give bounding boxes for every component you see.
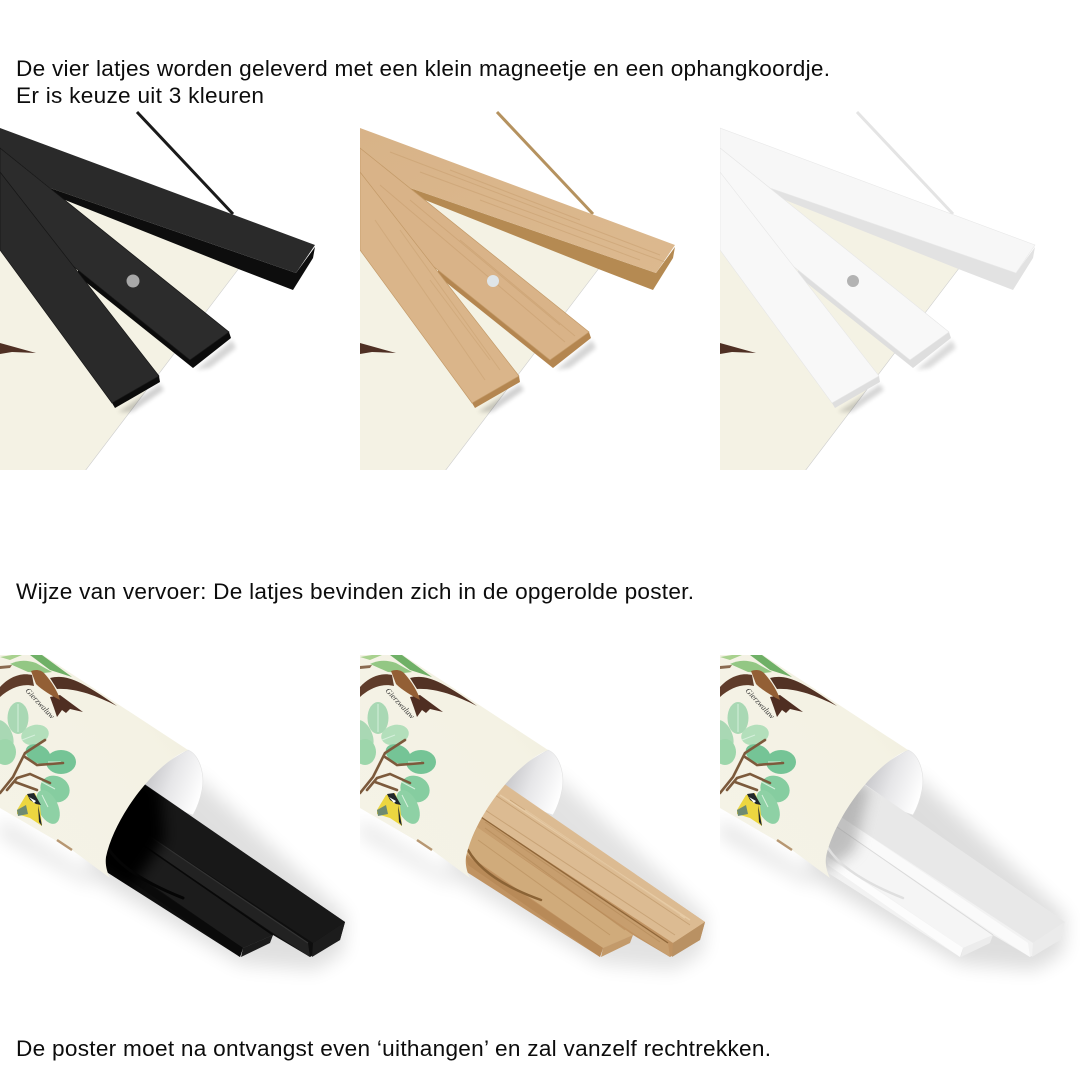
tube interior — [505, 750, 563, 814]
cord — [468, 850, 541, 900]
inner mouth shading — [810, 780, 870, 875]
species label: Gierzwaluw — [24, 686, 57, 721]
poster sheet — [0, 185, 243, 471]
shadow — [360, 775, 706, 970]
heading: intro text — [16, 56, 830, 108]
strips — [106, 784, 345, 957]
bird tail detail — [720, 343, 756, 354]
rolled poster — [348, 655, 548, 878]
species label: Gierzwaluw — [744, 686, 777, 721]
strips — [466, 784, 705, 957]
rolled poster — [708, 655, 908, 878]
strip three — [0, 172, 164, 412]
bird tail detail — [0, 343, 36, 354]
strips — [780, 750, 1065, 957]
strip one — [360, 128, 675, 290]
hanging cord — [857, 112, 953, 214]
tube interior — [840, 750, 923, 815]
strip one — [0, 128, 315, 290]
tube interior — [145, 750, 203, 814]
inner mouth darkening — [106, 785, 167, 890]
panel: white strips in tube — [708, 655, 1066, 970]
strip one — [720, 128, 1035, 290]
hanging cord — [497, 112, 593, 214]
strip two with magnet — [360, 148, 596, 370]
panel: oak strips on poster — [360, 112, 675, 471]
poster artwork — [348, 655, 477, 850]
shadow — [720, 775, 1066, 970]
bird tail detail — [360, 343, 396, 354]
panel: black strips in tube — [0, 655, 346, 970]
strip three — [360, 172, 524, 412]
rolled poster — [0, 655, 188, 878]
poster artwork — [0, 655, 117, 850]
cord — [140, 876, 184, 900]
poster artwork — [708, 655, 837, 850]
panel: oak strips in tube — [348, 655, 706, 970]
strip two with magnet — [0, 148, 236, 370]
cord — [828, 848, 903, 898]
tube lower lip — [100, 850, 135, 883]
poster sheet — [720, 185, 963, 471]
tube lower lip — [820, 850, 855, 883]
panel: white strips on poster — [720, 112, 1035, 471]
strip two with magnet — [720, 148, 956, 370]
tube lower lip — [460, 850, 495, 883]
footer text: De poster moet na ontvangst even ‘uithangen’ en zal vanzelf rechtrekken. — [16, 1036, 771, 1061]
heading: intro text: Er is keuze uit 3 kleuren — [16, 83, 264, 108]
strip three — [720, 172, 884, 412]
heading: intro text: De vier latjes worden geleverd met een klein magneetje en een ophangkoordje. — [16, 56, 830, 81]
shadow — [0, 775, 346, 970]
hanging cord — [137, 112, 233, 214]
panel: black strips on poster — [0, 112, 315, 471]
poster sheet — [360, 185, 603, 471]
species label: Gierzwaluw — [384, 686, 417, 721]
subheading: transport: Wijze van vervoer: De latjes bevinden zich in de opgerolde poster. — [16, 579, 694, 604]
